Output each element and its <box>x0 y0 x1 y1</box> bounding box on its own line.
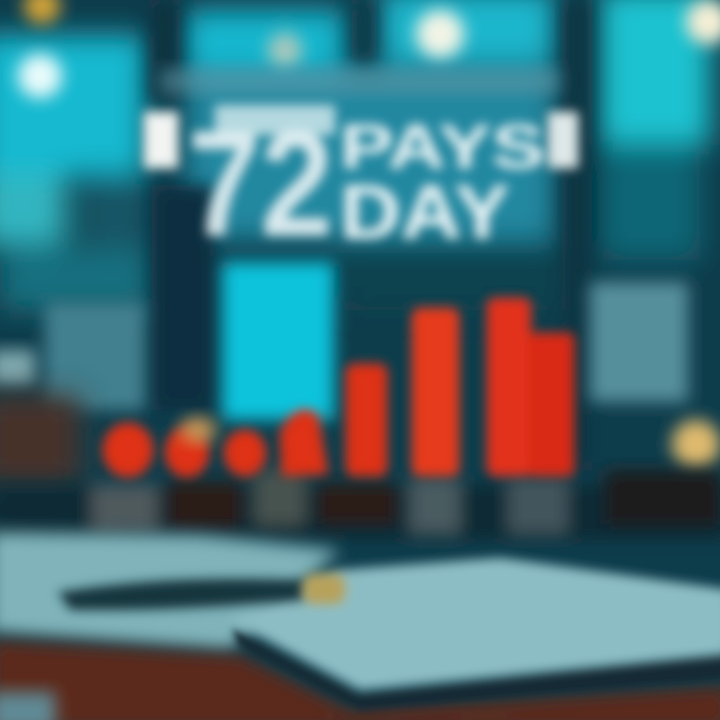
desk: left paper sheet <box>0 532 340 650</box>
background: dark columns <box>150 0 592 470</box>
pen: gold clip <box>303 574 345 604</box>
bar 7 <box>487 298 531 476</box>
desk: corner glare <box>0 692 55 720</box>
title: blurred headline: DAY <box>340 170 510 255</box>
bar 3 <box>224 430 266 476</box>
panel: left grey-blue screen <box>45 302 145 410</box>
notebook: shadow edge <box>232 628 720 710</box>
notebook: light blue cover <box>230 558 720 690</box>
lights: glowing bokeh <box>18 0 720 468</box>
panel: central cyan window <box>222 262 334 420</box>
bar 1 <box>103 423 153 477</box>
panel: small left pale block <box>0 350 35 385</box>
bar 8 <box>528 333 574 476</box>
title: blurred headline: PAYS <box>340 113 545 182</box>
base: dark desk band <box>0 470 720 540</box>
panel: right grey-blue screen <box>590 282 688 402</box>
bar 2 <box>165 427 209 477</box>
bar 6 <box>412 308 459 476</box>
pen: dark barrel <box>58 578 305 610</box>
left wall: brown shelf <box>0 395 80 485</box>
title band: faint upper line <box>160 68 560 94</box>
glow: gold top on bar 2 <box>180 417 216 443</box>
desk: wood surface <box>0 640 720 720</box>
title: blurred headline <box>144 99 578 267</box>
bar chart: red bars <box>103 298 574 477</box>
bar 5 <box>346 364 387 476</box>
background: cyan windows <box>0 0 710 310</box>
title: blurred headline: 72 <box>188 99 333 267</box>
bar 4 <box>280 409 328 476</box>
